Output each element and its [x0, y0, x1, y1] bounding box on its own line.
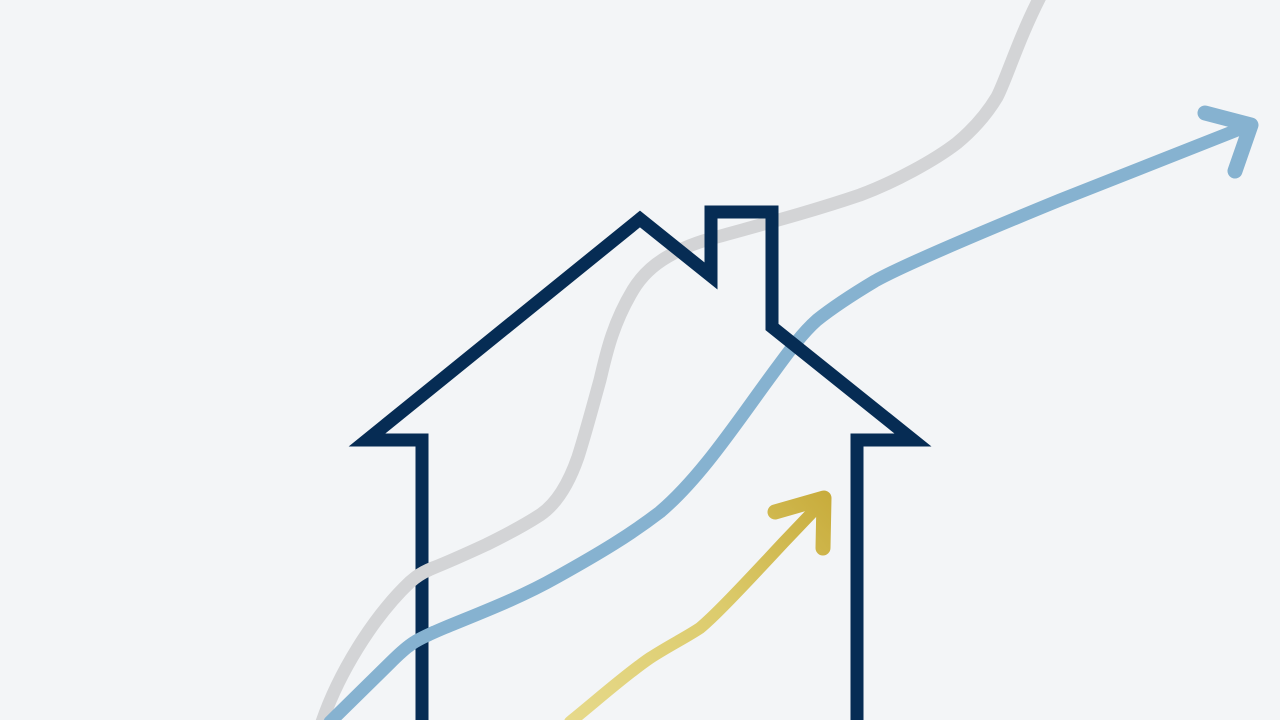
grey trend line [322, 0, 1040, 720]
blue trend line with arrowhead [330, 113, 1251, 720]
trend lines passing in front of the left wall [412, 562, 432, 652]
illustration: house with rising trend lines [316, 0, 1258, 720]
yellow trend line with arrowhead [570, 498, 824, 720]
house outline [367, 212, 913, 720]
